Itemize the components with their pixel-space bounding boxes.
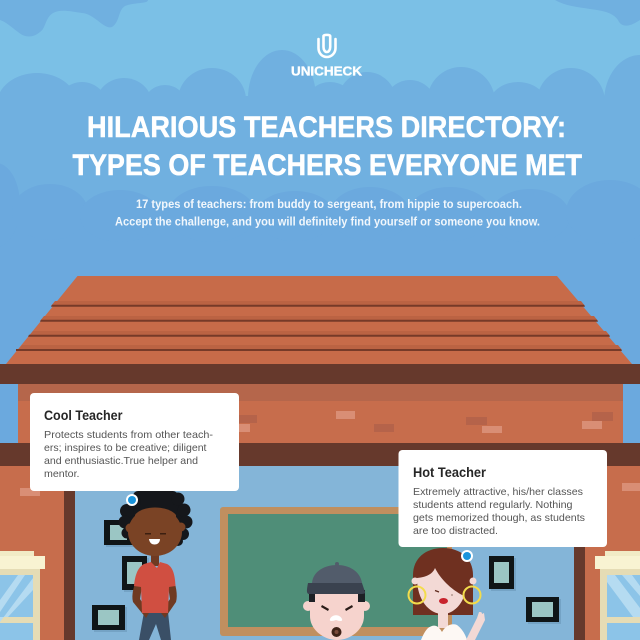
white top [421, 624, 467, 640]
marker dot [461, 550, 473, 562]
card text: Protects students from other teach- [44, 429, 214, 441]
face [417, 568, 464, 614]
character: hot teacher [408, 548, 485, 640]
head [126, 508, 186, 556]
school building [0, 276, 640, 640]
earrings [408, 586, 480, 604]
blackboard [220, 507, 452, 636]
card text: gets memorized though, as students [413, 512, 585, 524]
card heading: Hot Teacher [413, 465, 487, 480]
roof beams [0, 364, 640, 466]
face [145, 533, 166, 544]
neck [438, 608, 448, 628]
lips and eye [435, 590, 453, 604]
arms [132, 575, 177, 618]
title: TYPES OF TEACHERS EVERYONE MET [72, 149, 582, 182]
card text: mentor. [44, 468, 80, 480]
logo wordmark: UNICHECK [291, 64, 363, 78]
card text: Extremely attractive, his/her classes [413, 486, 583, 498]
card text: students attend regularly. Nothing [413, 499, 573, 511]
card text [413, 486, 585, 537]
subtitle: Accept the challenge, and you will definitely find yourself or someone you know. [115, 216, 540, 228]
raised arm [466, 612, 485, 640]
ears [412, 578, 476, 584]
title: HILARIOUS TEACHERS DIRECTORY: [87, 111, 566, 144]
card: Hot Teacher [398, 450, 607, 547]
classroom wall [75, 466, 574, 640]
legs [139, 612, 171, 640]
subtitle: 17 types of teachers: from buddy to sergeant, from hippie to supercoach. [136, 199, 522, 211]
wall pictures [92, 520, 561, 632]
hair [118, 490, 192, 546]
roof [6, 276, 632, 364]
card heading: Cool Teacher [44, 408, 123, 423]
card text: ers; inspires to be creative; diligent [44, 442, 207, 454]
card text: and enthusiastic.True helper and [44, 455, 198, 467]
upper wall [18, 384, 623, 444]
neck [151, 552, 159, 566]
lower wall [0, 466, 640, 640]
hair back [413, 548, 473, 615]
card: Cool Teacher [30, 393, 239, 491]
hair sides [309, 590, 365, 602]
card text [44, 429, 214, 480]
title [72, 111, 582, 182]
icon: paperclip U [318, 35, 336, 57]
marker dot [126, 494, 138, 506]
beanie band [307, 583, 365, 594]
card text: are too distracted. [413, 525, 498, 537]
ears [303, 601, 370, 611]
subtitle [115, 199, 540, 228]
pillars [64, 466, 585, 640]
shirt [134, 562, 176, 613]
face details [321, 605, 353, 637]
logo: Unicheck [291, 35, 363, 78]
beanie [312, 565, 362, 583]
character: cool teacher [118, 490, 192, 640]
left window [0, 551, 45, 640]
right window [595, 551, 640, 640]
head [310, 590, 364, 640]
character: strict teacher [303, 562, 370, 640]
